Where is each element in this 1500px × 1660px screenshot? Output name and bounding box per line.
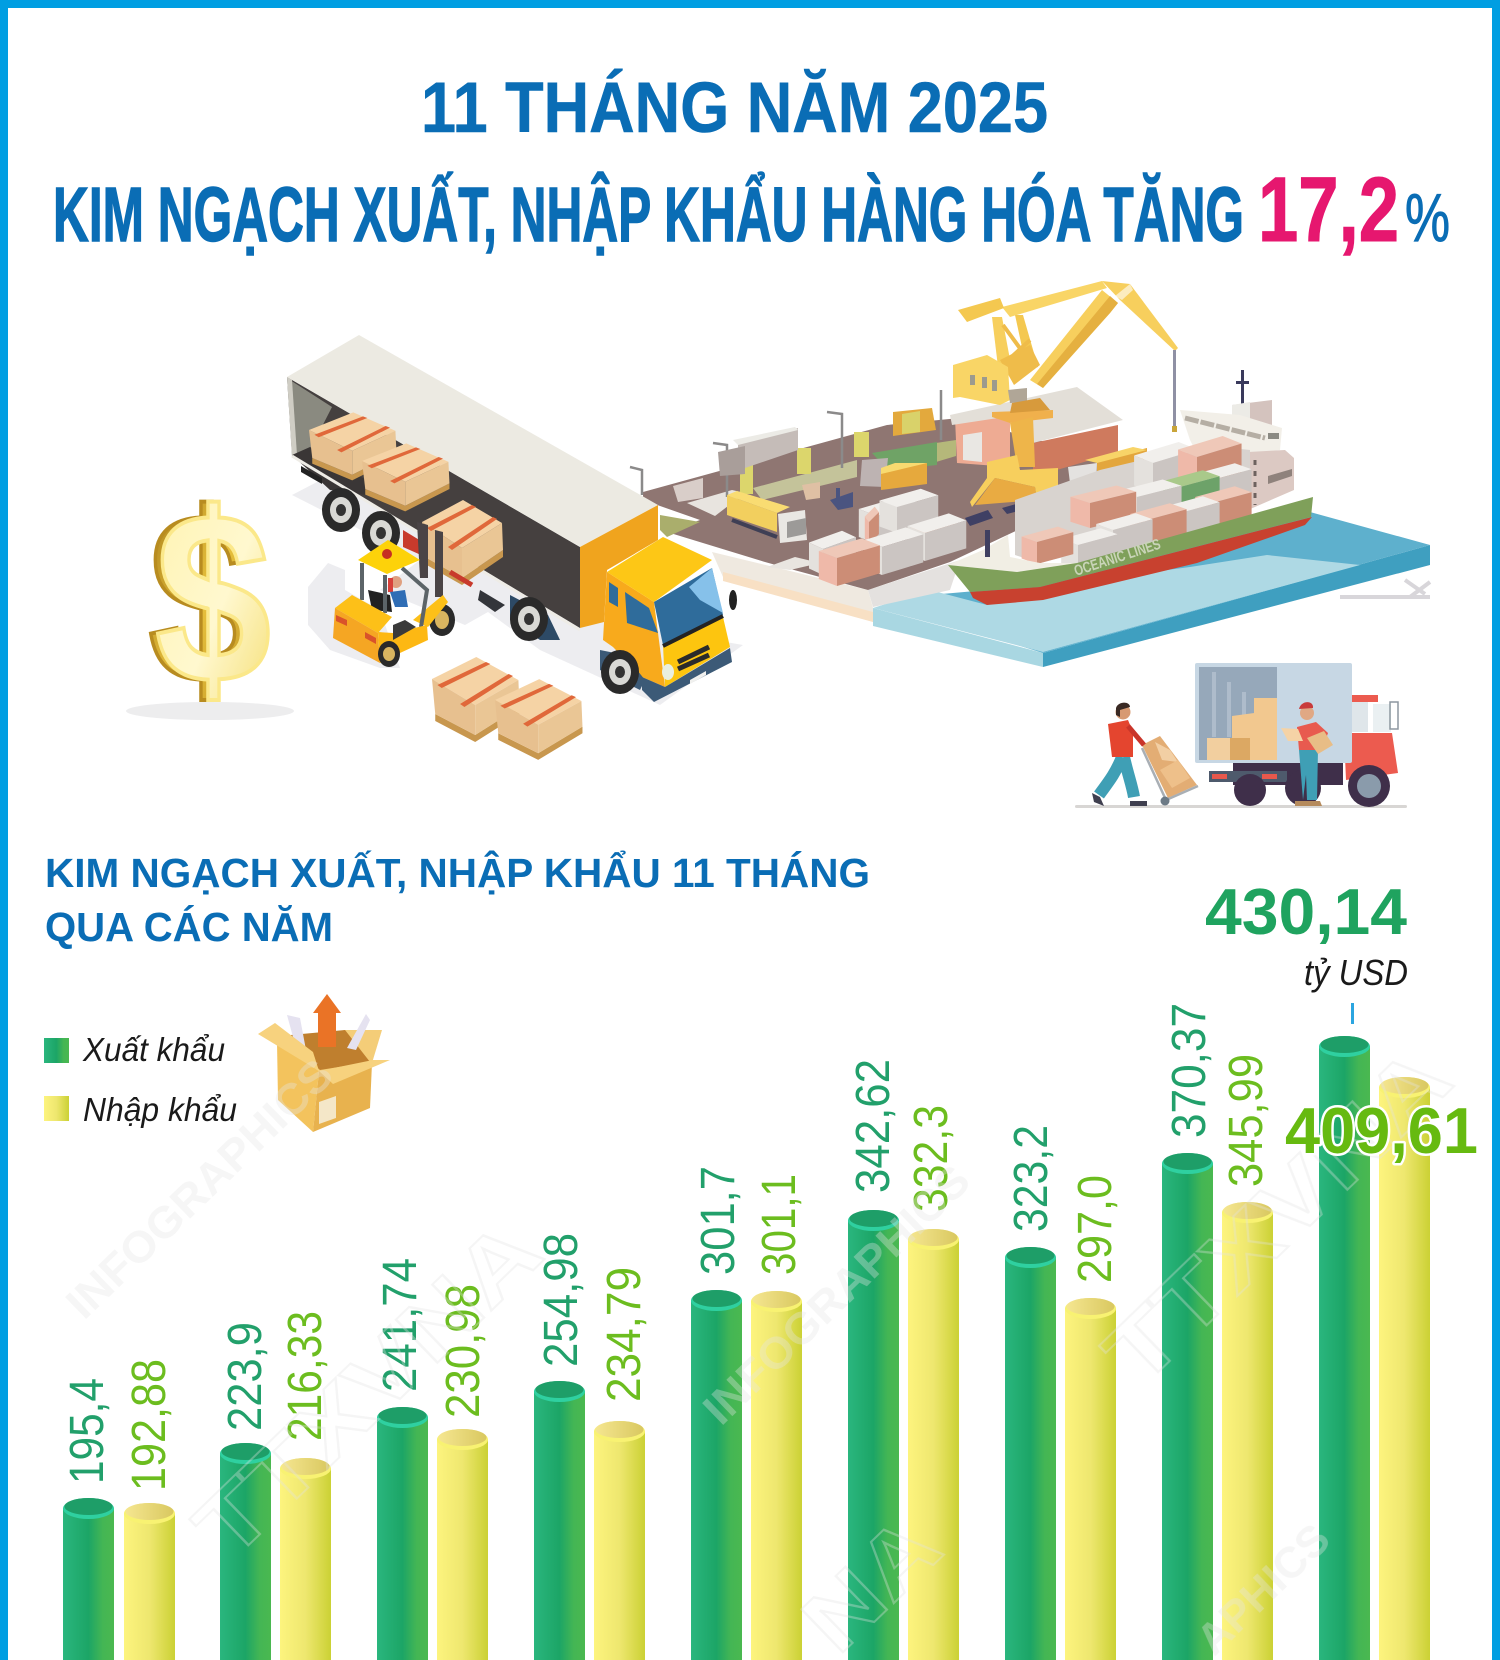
import value labels: 230,98 [437, 1284, 490, 1418]
bars group 5 [691, 1290, 802, 1660]
watermarks: TTXVNA [1086, 1028, 1470, 1404]
import value labels: 297,0 [1069, 1175, 1122, 1283]
title line 1: 11 THÁNG NĂM 2025 [421, 69, 1048, 148]
heading line 1: KIM NGẠCH XUẤT, NHẬP KHẨU 11 THÁNG [45, 849, 870, 896]
import value labels: 301,1 [753, 1174, 806, 1275]
title [53, 69, 1450, 261]
bars group 4 [534, 1381, 645, 1660]
watermarks [57, 1028, 1470, 1660]
trailer [287, 335, 658, 630]
cargo in trailer [309, 412, 449, 511]
import value labels [123, 1054, 1273, 1491]
bars group 9 [1319, 1036, 1430, 1660]
import value labels: 234,79 [598, 1267, 651, 1402]
dollar glyph: $ [155, 463, 271, 734]
highlighted import value: 409,61 [1285, 1094, 1478, 1167]
export value labels: 301,7 [692, 1166, 745, 1275]
small trucks [673, 408, 937, 543]
ship containers [1022, 436, 1252, 569]
truck cab [600, 537, 737, 702]
import value labels: 345,99 [1220, 1054, 1273, 1187]
hull [948, 535, 1077, 572]
bars group 1 [63, 1498, 175, 1660]
import value labels: 332,3 [905, 1105, 958, 1212]
pallets on ground [432, 657, 582, 760]
illustration: truck and forklift [287, 335, 743, 760]
watermarks: INFOGRAPHICS [57, 1050, 343, 1328]
bar chart [61, 875, 1430, 1660]
illustration: port and ship [630, 281, 1430, 667]
export value labels: 241,74 [374, 1258, 427, 1392]
highlighted export value: 430,14 [1205, 875, 1407, 948]
deck base under containers [1015, 445, 1250, 563]
dollar glyph: $ [148, 463, 264, 734]
lamps [630, 390, 941, 497]
unit label: tỷ USD [1304, 952, 1408, 993]
land containers [809, 489, 966, 586]
export value labels: 342,62 [847, 1059, 900, 1193]
container ship [948, 370, 1313, 605]
trailer wheels [322, 488, 560, 641]
export value labels: 254,98 [535, 1233, 588, 1367]
illustration: dollar sign [126, 463, 294, 734]
bars group 3 [377, 1407, 488, 1660]
bars group 7 [1005, 1247, 1116, 1660]
ground line [1075, 805, 1407, 808]
worker with hand truck [1092, 703, 1198, 806]
import value labels: 192,88 [123, 1359, 176, 1491]
chart heading [45, 849, 870, 950]
export value labels: 223,9 [219, 1322, 272, 1431]
warehouse [950, 387, 1123, 477]
bars group 8 [1162, 1153, 1273, 1660]
percent sign: % [1405, 180, 1450, 256]
delivery truck [1195, 663, 1398, 807]
import value labels: 216,33 [279, 1311, 332, 1441]
ground shadows [292, 470, 743, 705]
export value labels [61, 1003, 1216, 1484]
legend: imports: Nhập khẩu [83, 1091, 237, 1128]
watermarks: INFOGRAPHICS [694, 1156, 980, 1434]
tick [1351, 1003, 1354, 1024]
worker with parcel [1281, 702, 1333, 806]
highlighted growth figure: 17,2 [1258, 159, 1399, 261]
icon: open box with arrow [258, 994, 390, 1132]
heading line 2: QUA CÁC NĂM [45, 904, 333, 950]
box on forklift [422, 500, 503, 585]
forklift [333, 522, 472, 667]
bars group 2 [220, 1443, 331, 1660]
export value labels: 370,37 [1163, 1003, 1216, 1138]
water [873, 512, 1430, 667]
harbour crane [953, 281, 1178, 526]
legend: exports: Xuất khẩu [82, 1031, 225, 1068]
dollar shadow [126, 702, 294, 720]
legend [44, 1031, 237, 1128]
bars group 6 [848, 1210, 959, 1660]
watermarks: APHICS [1187, 1514, 1340, 1660]
illustration: delivery truck and workers [1075, 663, 1407, 808]
watermarks: TTXVNA [176, 1201, 560, 1577]
superstructure [1180, 370, 1294, 510]
quay ground [643, 418, 1145, 622]
quay truck behind ship [1068, 447, 1147, 492]
yard pillars [740, 432, 869, 494]
ship name: OCEANIC LINES [1072, 536, 1163, 580]
export value labels: 195,4 [61, 1378, 114, 1484]
export value labels: 323,2 [1005, 1125, 1058, 1232]
